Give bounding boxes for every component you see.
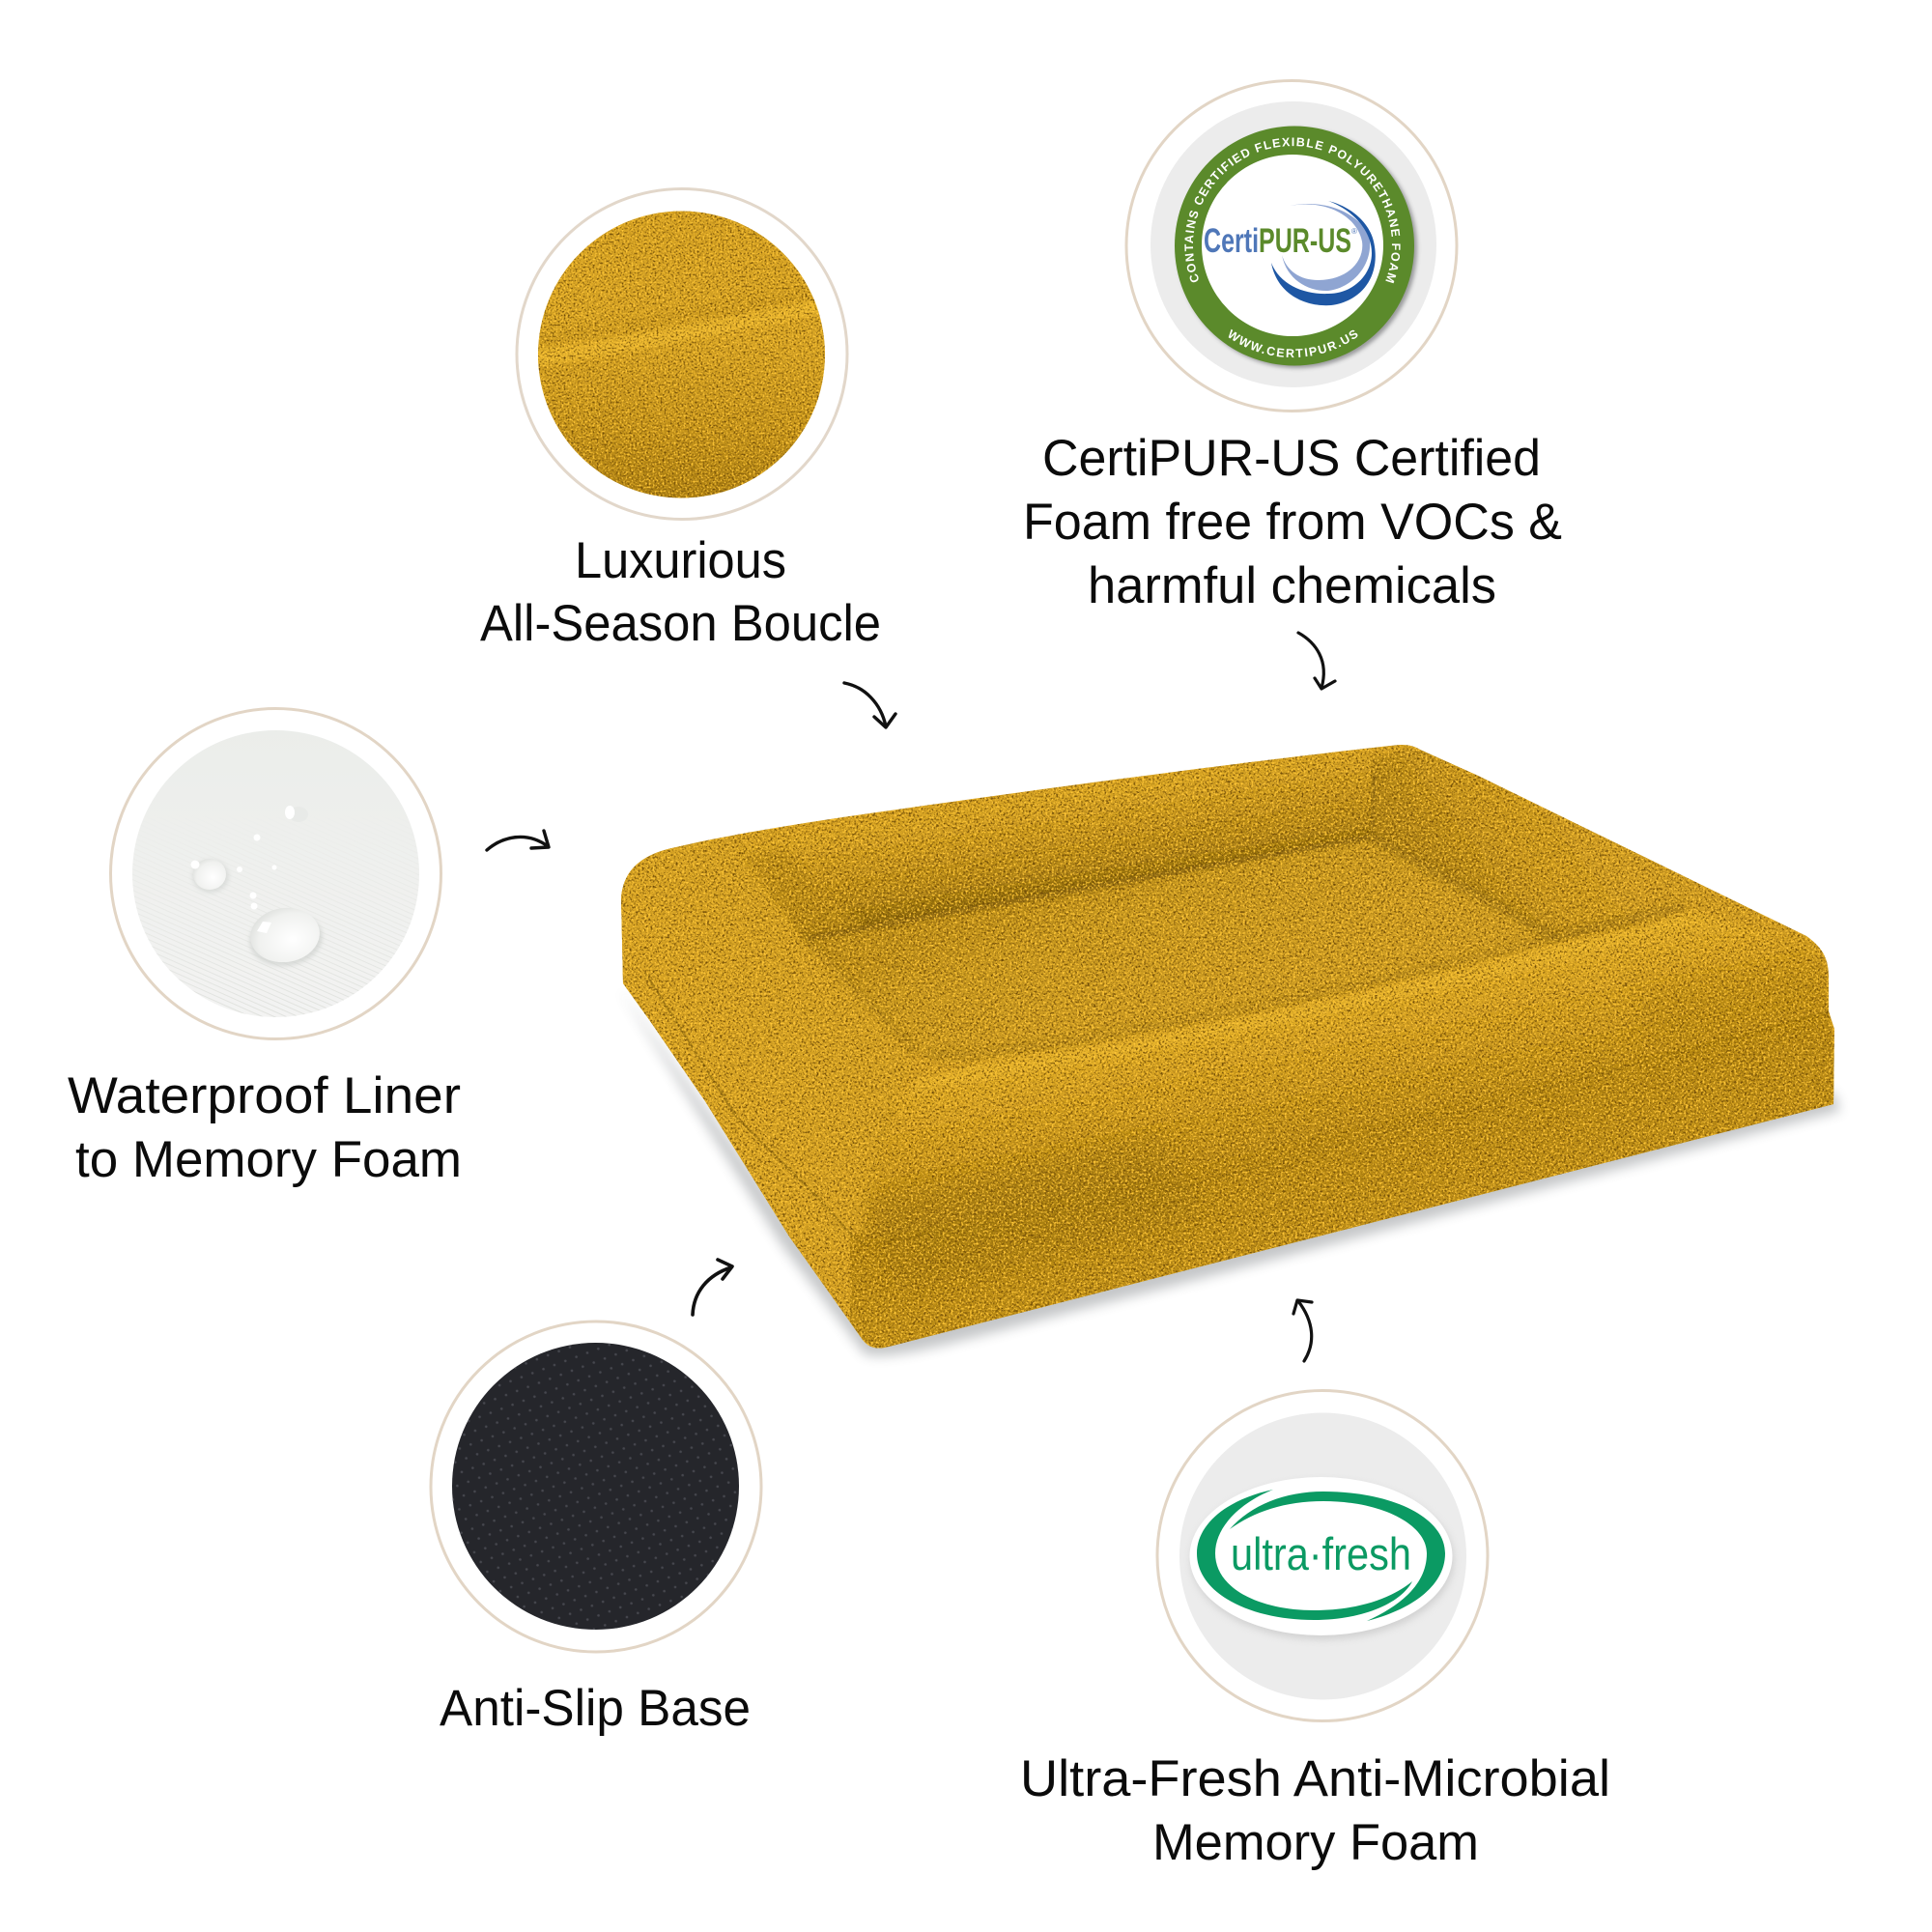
right bolster [1372, 746, 1816, 942]
right wall base shadow [1372, 837, 1563, 942]
arrow: waterproof to bed [487, 831, 549, 850]
back bolster wall [775, 775, 1372, 939]
swoosh dark [1271, 201, 1376, 305]
bed body [621, 745, 1834, 1349]
badge grey disc [1151, 101, 1436, 387]
panel: boucle swatch [517, 189, 847, 520]
left seam [645, 973, 867, 1245]
heading: certipur-us: Foam free from VOCs & [1023, 494, 1562, 551]
swoosh light [1282, 204, 1370, 291]
heading: anti-slip: Anti-Slip Base [440, 1680, 751, 1737]
waterproof ring [110, 709, 440, 1039]
shadow behind right ridge tip [1563, 906, 1686, 935]
floor left edge shadow [806, 939, 918, 1053]
heading: ultra-fresh: Ultra-Fresh Anti-Microbial [1020, 1750, 1610, 1807]
front bolster ridge highlight [913, 920, 1686, 1084]
anti-slip ring [431, 1321, 761, 1652]
heading: waterproof: to Memory Foam [75, 1131, 462, 1188]
heading: certipur-us: harmful chemicals [1088, 557, 1496, 614]
bed floor [806, 836, 1563, 1063]
droplets [237, 806, 295, 910]
ultra-fresh ring [1157, 1391, 1488, 1721]
small water drop [191, 859, 229, 893]
registered mark: ® [1351, 227, 1357, 236]
badge seal [1175, 126, 1420, 371]
left inner wall shade [744, 848, 865, 939]
waterproof fabric [126, 724, 425, 1024]
heading: boucle: All-Season Boucle [480, 595, 881, 652]
back wall crease shadow [806, 837, 1372, 939]
arrow: anti-slip to bed [693, 1260, 732, 1315]
boucle fabric [531, 203, 831, 502]
ultra-fresh logotype: ultra·fresh [1231, 1528, 1411, 1579]
fabric texture [580, 715, 1874, 1391]
front-right end shade [1642, 952, 1829, 1058]
panel: anti-slip swatch [431, 1321, 761, 1652]
anti-slip material [444, 1338, 744, 1637]
arrow: ultra-fresh to bed [1293, 1300, 1312, 1361]
large water drop [249, 908, 323, 967]
front seam [867, 1011, 1829, 1245]
heading: certipur-us: CertiPUR-US Certified [1042, 430, 1541, 487]
arrow: boucle to bed [844, 683, 895, 727]
floor front edge shadow [927, 935, 1563, 1054]
certipur logotype: CertiPUR-US [1204, 222, 1351, 260]
heading: ultra-fresh: Memory Foam [1152, 1814, 1479, 1871]
panel: waterproof swatch [110, 709, 440, 1039]
heading: certipur-us [1023, 430, 1562, 614]
panel: ultra-fresh badge [1157, 1391, 1488, 1721]
arrow: certipur to bed [1298, 633, 1335, 689]
seal ring text top: CONTAINS CERTIFIED FLEXIBLE POLYURETHANE FOAM [1184, 137, 1401, 284]
boucle ring [517, 189, 847, 520]
heading: boucle: Luxurious [575, 532, 786, 589]
left corner crease [863, 1104, 895, 1243]
seal ring text bottom: WWW.CERTIPUR.US [1229, 328, 1358, 357]
left bolster [621, 838, 796, 1246]
panel: certipur-us badge [1124, 79, 1459, 412]
heading: boucle [480, 532, 881, 652]
heading: waterproof: Waterproof Liner [68, 1067, 461, 1124]
ultra-fresh grey disc [1179, 1412, 1466, 1700]
inner corner crease [1372, 773, 1375, 837]
base band [850, 1005, 1840, 1352]
heading: waterproof [68, 1067, 462, 1188]
bed shadow [618, 987, 1840, 1355]
corner shade [869, 1130, 1208, 1294]
badge outer ring [1126, 81, 1457, 412]
heading: ultra-fresh [1020, 1750, 1610, 1871]
product: boucle dog bed [621, 745, 1834, 1349]
front bolster [863, 911, 1829, 1246]
ultra-fresh logo [1190, 1477, 1454, 1639]
